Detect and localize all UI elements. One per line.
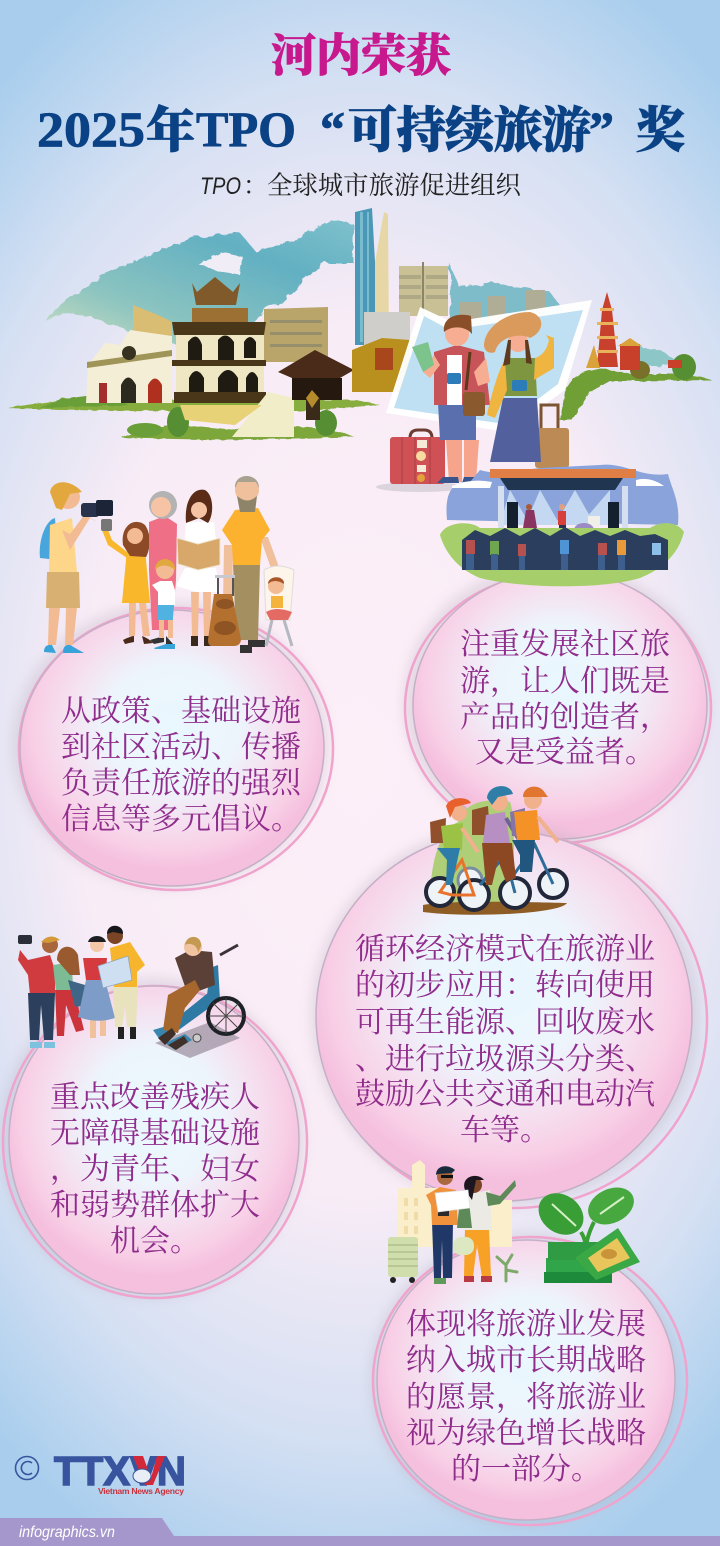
grandmother <box>149 491 177 645</box>
sprout <box>530 1180 640 1250</box>
illustration: diverse travellers and wheelchair user <box>18 926 244 1058</box>
performers <box>523 510 537 528</box>
green ground <box>8 398 380 411</box>
circle 5 text: 视为绿色增长战略 <box>406 1417 646 1450</box>
circle 2 text: 产品的创造者， <box>460 701 670 734</box>
stairs <box>232 392 294 437</box>
brown suitcase <box>541 405 558 430</box>
ground <box>423 902 567 915</box>
bike frames <box>440 845 553 895</box>
money <box>544 1228 640 1283</box>
Landmark tower <box>355 208 375 345</box>
title line 2: TPO <box>196 101 296 157</box>
circle 2 text: 又是受益者。 <box>475 736 655 769</box>
wheels <box>426 868 567 910</box>
footer band <box>0 1518 720 1546</box>
title line 2: 可持续旅游 <box>348 103 591 158</box>
rider middle <box>472 786 522 885</box>
circle 5 text: 体现将旅游业发展 <box>406 1308 646 1341</box>
circle 2 text: 游，让人们既是 <box>460 665 670 698</box>
woman blue skirt <box>78 936 115 1038</box>
circle 5 text: 的一部分。 <box>451 1453 601 1486</box>
subtitle: 全球城市旅游促进组织 <box>267 172 522 200</box>
bag roll <box>453 1237 474 1255</box>
city buildings <box>398 1160 512 1247</box>
Tran Quoc pagoda <box>597 292 618 367</box>
circle 4 text: 无障碍基础设施 <box>50 1117 260 1150</box>
tourist man <box>412 315 490 483</box>
traveller with camera <box>18 935 60 1048</box>
circle 3 text: 、进行垃圾源头分类、 <box>355 1043 655 1076</box>
circle 1 <box>12 602 333 890</box>
map <box>386 300 592 432</box>
title line 1: 河内荣获 <box>271 31 451 81</box>
title line 2: 年 <box>146 103 195 158</box>
circle 3 text: 循环经济模式在旅游业 <box>355 933 655 966</box>
copyright symbol <box>16 1456 38 1480</box>
title line 2: “ <box>320 101 345 157</box>
grass <box>440 523 684 586</box>
stroller <box>264 566 294 646</box>
watercolor sky <box>46 220 682 367</box>
bush <box>430 800 514 905</box>
title line 2: 奖 <box>636 103 685 158</box>
man yellow shirt <box>98 926 145 1039</box>
circle 1 text: 负责任旅游的强烈 <box>61 767 302 800</box>
crowd <box>462 527 668 570</box>
title line 2: 2025 <box>37 101 145 157</box>
circle 4 text: 机会。 <box>110 1225 200 1258</box>
circle 4 text: 重点改善残疾人 <box>50 1081 260 1114</box>
circle 2 text: 注重发展社区旅 <box>460 628 670 661</box>
illustration: tourists and city <box>388 1160 640 1284</box>
subtitle: ： <box>243 173 268 200</box>
circle 4 <box>0 978 307 1298</box>
circle 5 text: 的愿景，将旅游业 <box>406 1381 646 1414</box>
illustration: music festival stage <box>440 465 684 586</box>
suitcase red <box>376 482 464 492</box>
title line 2: ” <box>589 101 614 157</box>
Turtle Tower <box>192 277 240 305</box>
logo: TTXVN: Vietnam News Agency <box>98 1486 184 1496</box>
circle 1 text: 信息等多元倡议。 <box>61 803 301 836</box>
tourist woman <box>484 312 554 462</box>
girl <box>101 519 153 644</box>
circle 3 text: 可再生能源、回收废水 <box>355 1006 655 1039</box>
small plant <box>497 1255 517 1281</box>
circle 3 text: 车等。 <box>460 1114 550 1147</box>
temple gate <box>352 338 410 392</box>
woman with map <box>176 490 220 646</box>
circle 3 <box>311 825 707 1208</box>
illustration: cyclists <box>423 786 567 915</box>
wheelchair user <box>153 937 244 1058</box>
stage backdrop <box>446 465 678 525</box>
One Pillar Pagoda <box>278 350 354 378</box>
rider right <box>510 787 558 872</box>
gate building <box>133 305 172 346</box>
logo: TTXVN: TTXVN <box>54 1448 186 1494</box>
circle 3 text: 的初步应用：转向使用 <box>355 969 655 1002</box>
illustration: family tourists <box>40 476 294 653</box>
circle 4 text: ，为青年、妇女 <box>50 1153 260 1186</box>
circle 1 text: 到社区活动、传播 <box>61 731 301 764</box>
right greens <box>560 368 712 420</box>
block building <box>264 307 328 362</box>
subtitle: TPO <box>200 173 241 200</box>
photographer <box>40 482 113 653</box>
illustration: Hanoi skyline <box>8 208 712 492</box>
rider left <box>430 798 478 885</box>
circle 5 text: 纳入城市长期战略 <box>406 1344 646 1377</box>
circle 3 text: 鼓励公共交通和电动汽 <box>355 1078 655 1111</box>
circle 2 <box>403 563 711 843</box>
high-rise buildings <box>399 266 448 316</box>
suitcase <box>388 1237 418 1277</box>
man <box>426 1166 458 1284</box>
roof <box>490 469 636 478</box>
woman <box>435 1176 516 1282</box>
website label: infographics.vn <box>19 1524 115 1541</box>
woman green shirt <box>53 947 87 1036</box>
title line 2 <box>37 101 685 158</box>
suitcase <box>208 575 241 646</box>
boy <box>152 559 175 649</box>
circle 4 text: 和弱势群体扩大 <box>50 1189 260 1222</box>
circle 1 text: 从政策、基础设施 <box>61 695 301 728</box>
circle 5 <box>370 1234 687 1526</box>
speakers and truss <box>507 502 518 534</box>
grandfather <box>222 476 280 653</box>
